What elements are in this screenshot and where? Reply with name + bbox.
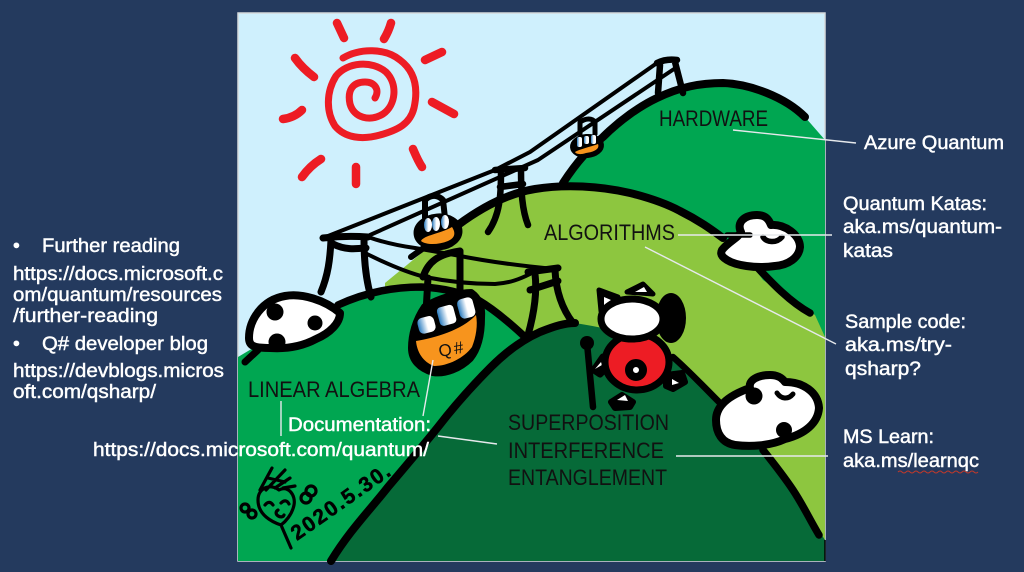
hanger: small gondola left xyxy=(411,196,445,257)
label: hardware: HARDWARE xyxy=(659,106,768,131)
cloud: right xyxy=(716,375,819,446)
icon: sun xyxy=(283,23,454,184)
text block: azure quantum: Azure Quantum xyxy=(864,132,1004,154)
label: quantum concepts: INTERFERENCE xyxy=(508,438,664,463)
tail xyxy=(656,293,686,343)
text block: further reading xyxy=(13,235,224,403)
text block: documentation: Documentation: xyxy=(288,414,431,436)
text block: ms learn xyxy=(843,426,979,473)
text block: further reading: https://devblogs.micros xyxy=(13,360,224,382)
body xyxy=(605,334,669,390)
text block: further reading: • xyxy=(13,333,20,355)
text block: further reading: Further reading xyxy=(42,235,180,257)
tower: top xyxy=(657,60,683,93)
panel: illustration xyxy=(238,13,825,561)
cloud: algorithms xyxy=(721,215,800,267)
windows xyxy=(416,296,477,335)
label: quantum concepts: ENTANGLEMENT xyxy=(508,465,667,490)
date: 2020.5.30. xyxy=(287,460,395,545)
text block: further reading: /further-reading xyxy=(13,305,158,327)
gondola: Q# xyxy=(412,293,481,372)
belly ring xyxy=(629,363,643,377)
text block: quantum katas: Quantum Katas: xyxy=(843,193,987,215)
cloud: left xyxy=(249,295,340,350)
hill: algorithms xyxy=(385,185,825,561)
ears xyxy=(599,284,653,311)
gondola: small left xyxy=(415,214,461,250)
Q# label: Q# xyxy=(437,338,465,361)
text block: documentation xyxy=(93,414,431,461)
hanger: small gondola right xyxy=(580,119,595,134)
character: artist doodle xyxy=(241,468,316,548)
text block: quantum katas: aka.ms/quantum- xyxy=(843,216,1002,238)
tower: front xyxy=(528,268,573,335)
text block: sample code: qsharp? xyxy=(845,358,921,380)
hill: foundations xyxy=(331,323,825,561)
stick xyxy=(587,343,593,407)
arm xyxy=(594,357,609,374)
text block: sample code: Sample code: xyxy=(845,311,966,333)
text block: ms learn: MS Learn: xyxy=(843,426,934,448)
head xyxy=(601,299,663,339)
label: quantum concepts: SUPERPOSITION xyxy=(508,410,669,435)
hanger: large gondola xyxy=(423,251,460,312)
text block: documentation: https://docs.microsoft.com/quantum/ xyxy=(93,439,430,461)
text block: quantum katas xyxy=(843,193,1002,262)
text block: further reading: • xyxy=(13,235,20,257)
label: quantum concepts xyxy=(508,410,669,490)
gondola: small right xyxy=(571,135,603,157)
cable lines xyxy=(323,63,677,284)
text block: sample code: aka.ms/try- xyxy=(845,334,952,356)
text block: ms learn: aka.ms/learnqc xyxy=(843,450,979,472)
text block: quantum katas: katas xyxy=(843,240,893,262)
text block: further reading: om/quantum/resources xyxy=(13,284,222,306)
connector lines xyxy=(281,130,856,456)
hill: linear algebra xyxy=(238,287,530,561)
hill: hardware xyxy=(555,83,825,400)
tower: far left xyxy=(321,236,371,297)
text block: further reading: oft.com/qsharp/ xyxy=(13,381,157,403)
label: linear algebra: LINEAR ALGEBRA xyxy=(248,377,420,402)
text block: further reading: https://docs.microsoft.c xyxy=(13,263,223,285)
text block: further reading: Q# developer blog xyxy=(42,333,208,355)
feet xyxy=(611,373,685,408)
text block: sample code xyxy=(845,311,966,380)
label: algorithms: ALGORITHMS xyxy=(544,220,675,245)
character: cat xyxy=(580,284,686,408)
sky xyxy=(238,13,825,561)
tower: middle xyxy=(488,168,528,232)
